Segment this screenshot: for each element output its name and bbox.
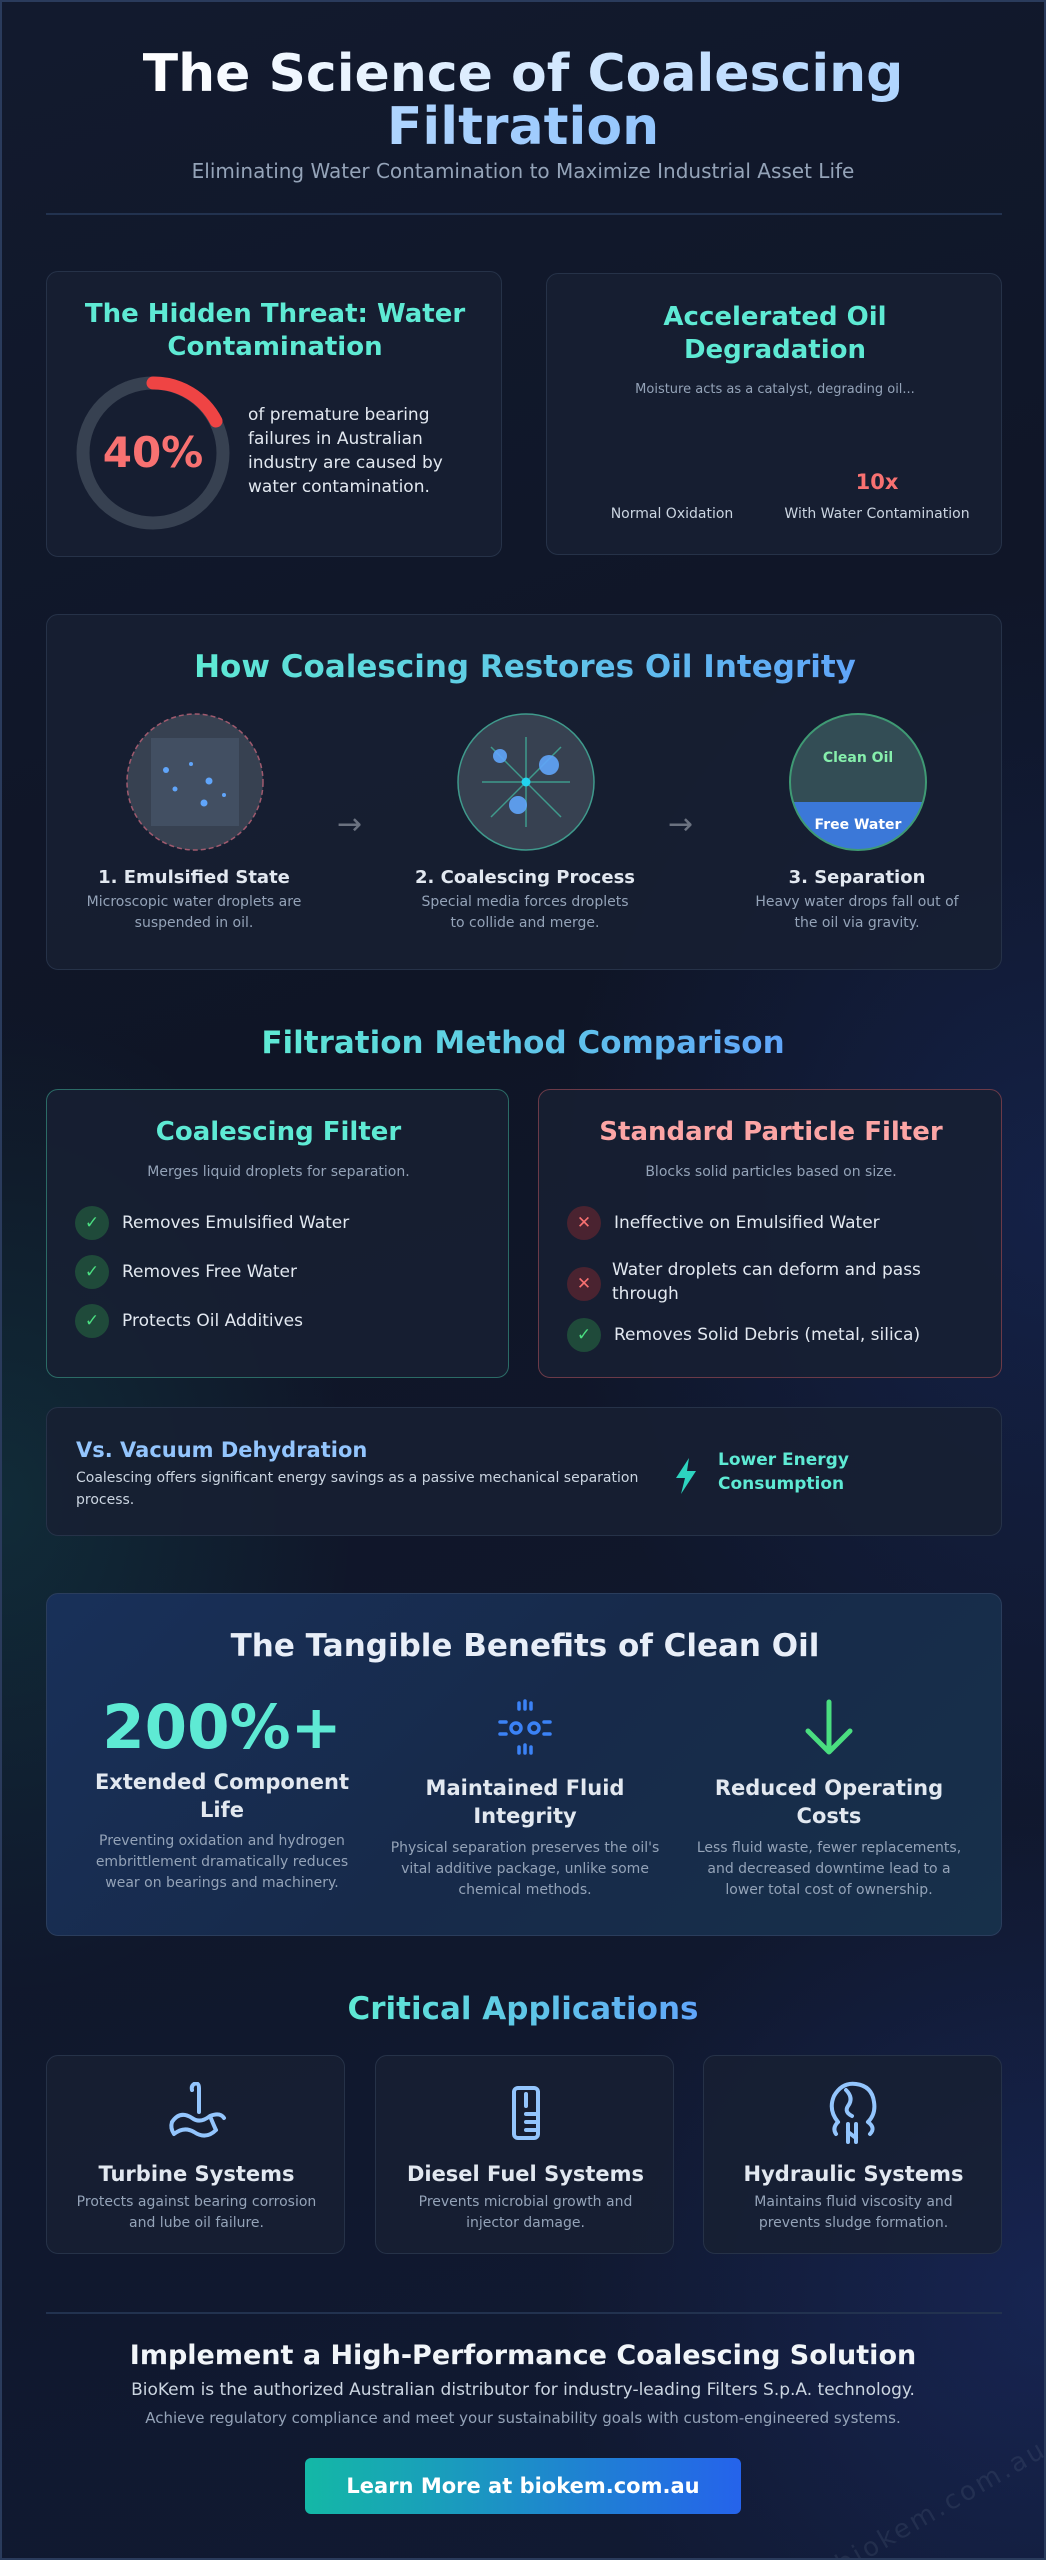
panel: hydraulic: prevents sludge formation. [759, 2215, 948, 2231]
button: learn more: Learn More at biokem.com.au [346, 2474, 700, 2498]
panel: hydraulic: Hydraulic Systems [744, 2162, 963, 2186]
icon: turbine [169, 2082, 226, 2138]
list: standard drawbacks: ✓ [577, 1325, 591, 1345]
benefit: component life: Life [200, 1798, 244, 1822]
callout: lower energy: Lower Energy [718, 1450, 849, 1470]
heading: vacuum: Vs. Vacuum Dehydration [76, 1438, 367, 1462]
callout: lower energy [718, 1450, 849, 1494]
benefit: component life [95, 1692, 349, 1891]
panel: turbine: Turbine Systems [98, 2162, 295, 2186]
step 1: Microscopic water droplets are [87, 894, 301, 910]
benefit: fluid integrity: Maintained Fluid [426, 1776, 624, 1800]
benefit: fluid integrity: vital additive package, unlike some [401, 1861, 649, 1877]
benefit: component life: embrittlement dramatically reduces [96, 1854, 348, 1870]
panel: turbine: and lube oil failure. [129, 2215, 264, 2231]
benefit: fluid integrity: Physical separation preserves the oil's [391, 1840, 659, 1856]
icon: emulsified circle [126, 713, 264, 851]
title: The Science of Coalescing [143, 44, 903, 104]
panel: turbine [46, 2055, 345, 2254]
bar chart labels: 10x [856, 470, 898, 494]
list: standard drawbacks: Removes Solid Debris (metal, silica) [614, 1325, 920, 1345]
step 3: Heavy water drops fall out of [755, 894, 959, 910]
heading: degradation [663, 302, 887, 365]
list: standard drawbacks: through [612, 1284, 679, 1304]
panel: standard filter: Blocks solid particles based on size. [645, 1164, 897, 1180]
list: standard drawbacks: Ineffective on Emulsified Water [614, 1213, 880, 1233]
arrow 2: → [668, 807, 693, 842]
benefit: operating costs: Costs [797, 1804, 861, 1828]
heading: hidden threat [85, 299, 466, 362]
heading: degradation: Accelerated Oil [663, 302, 887, 332]
panel: diesel [375, 2055, 674, 2254]
list: coalescing benefits [75, 1206, 350, 1338]
heading: standard filter: Standard Particle Filter [599, 1117, 943, 1147]
benefit: fluid integrity: chemical methods. [458, 1882, 592, 1898]
step 3 [755, 713, 959, 931]
panel: turbine: Protects against bearing corrosion [77, 2194, 316, 2210]
heading: coalescing filter: Coalescing Filter [156, 1117, 401, 1147]
benefit: component life: Preventing oxidation and hydrogen [99, 1833, 345, 1849]
button: learn more [305, 2458, 741, 2514]
icon: separation circle: Clean Oil [823, 750, 893, 766]
text: distributor: BioKem is the authorized Australian distributor for industry-leading Filters S.p.A. technology. [131, 2380, 915, 2400]
step 1: 1. Emulsified State [98, 867, 290, 888]
panel: oil degradation [546, 273, 1002, 555]
text: vacuum: Coalescing offers significant energy savings as a passive mechanical separation [76, 1470, 638, 1486]
step 2: Special media forces droplets [421, 894, 629, 910]
donut chart 40% [76, 376, 230, 530]
heading: degradation: Degradation [684, 335, 866, 365]
panel: hidden threat [46, 271, 502, 557]
panel: hydraulic: Maintains fluid viscosity and [754, 2194, 953, 2210]
title: Filtration [387, 97, 659, 157]
benefit: operating costs: Reduced Operating [715, 1776, 943, 1800]
stat text: water contamination. [248, 477, 430, 497]
panel: coalescing filter [46, 1089, 509, 1378]
subtitle: Eliminating Water Contamination to Maximize Industrial Asset Life [192, 159, 854, 183]
bar chart labels [611, 470, 970, 522]
panel: diesel: Diesel Fuel Systems [407, 2162, 644, 2186]
step 3: 3. Separation [789, 867, 925, 888]
step 2 [415, 713, 635, 931]
title [143, 44, 903, 157]
icon: separation circle: Free Water [815, 817, 902, 833]
arrow 1: → [337, 807, 362, 842]
bar chart labels: Normal Oxidation [611, 506, 733, 522]
panel: benefits [46, 1593, 1002, 1936]
benefit: fluid integrity: Integrity [473, 1804, 577, 1828]
icon: coalescing circle [457, 713, 595, 851]
list: coalescing benefits: ✓ [85, 1262, 99, 1282]
benefit: component life: 200%+ [102, 1692, 342, 1763]
panel: coalescing filter: Merges liquid droplets for separation. [147, 1164, 410, 1180]
benefit: operating costs: Less fluid waste, fewer replacements, [697, 1840, 961, 1856]
step 3: the oil via gravity. [794, 915, 920, 931]
panel: hydraulic [703, 2055, 1002, 2254]
panel: diesel: Prevents microbial growth and [419, 2194, 632, 2210]
icon: down arrow [806, 1700, 852, 1754]
donut chart 40%: 40% [103, 428, 203, 477]
heading: benefits: The Tangible Benefits of Clean Oil [231, 1628, 819, 1664]
step 1 [87, 713, 301, 931]
benefit: operating costs: lower total cost of ownership. [725, 1882, 933, 1898]
panel: diesel: injector damage. [466, 2215, 585, 2231]
list: coalescing benefits: ✓ [85, 1311, 99, 1331]
icon: molecules [498, 1699, 552, 1755]
panel: vacuum dehydration [46, 1407, 1002, 1536]
benefit: component life: wear on bearings and machinery. [105, 1875, 339, 1891]
icon: hydraulic [830, 2082, 876, 2144]
icon: separation circle [789, 713, 927, 851]
step 2: 2. Coalescing Process [415, 867, 635, 888]
stat text: of premature bearing [248, 405, 430, 425]
heading: process: How Coalescing Restores Oil Integrity [194, 649, 856, 685]
text: vacuum [76, 1470, 638, 1508]
heading: comparison: Filtration Method Comparison [261, 1025, 785, 1061]
list: coalescing benefits: Removes Free Water [122, 1262, 297, 1282]
heading: call to action: Implement a High-Performance Coalescing Solution [130, 2340, 916, 2371]
list: coalescing benefits: ✓ [85, 1213, 99, 1233]
list: coalescing benefits: Protects Oil Additives [122, 1311, 303, 1331]
benefit: component life: Extended Component [95, 1770, 349, 1794]
icon: fuel gauge [512, 2086, 540, 2140]
callout: lower energy: Consumption [718, 1474, 844, 1494]
list: standard drawbacks: ✕ [577, 1274, 591, 1294]
list: standard drawbacks [567, 1206, 921, 1352]
heading: applications: Critical Applications [347, 1991, 698, 2027]
panel: standard filter [538, 1089, 1002, 1378]
step 2: to collide and merge. [451, 915, 599, 931]
heading: hidden threat: The Hidden Threat: Water [85, 299, 465, 329]
icon: lightning [676, 1458, 696, 1494]
heading: hidden threat: Contamination [167, 332, 383, 362]
text: compliance: Achieve regulatory compliance and meet your sustainability goals with custom-engineered systems. [145, 2409, 901, 2427]
stat text [248, 405, 443, 497]
bar chart labels: With Water Contamination [784, 506, 970, 522]
step 1: suspended in oil. [135, 915, 253, 931]
benefit: operating costs: and decreased downtime lead to a [707, 1861, 951, 1877]
list: standard drawbacks: Water droplets can deform and pass [612, 1260, 921, 1280]
stat text: failures in Australian [248, 429, 423, 449]
list: coalescing benefits: Removes Emulsified Water [122, 1213, 349, 1233]
list: standard drawbacks: ✕ [577, 1213, 591, 1233]
text: vacuum: process. [76, 1492, 134, 1508]
panel: process [46, 614, 1002, 970]
benefit: fluid integrity [391, 1699, 659, 1898]
stat text: industry are caused by [248, 453, 443, 473]
benefit: operating costs [697, 1700, 961, 1898]
note: Moisture acts as a catalyst, degrading oil... [635, 382, 915, 397]
